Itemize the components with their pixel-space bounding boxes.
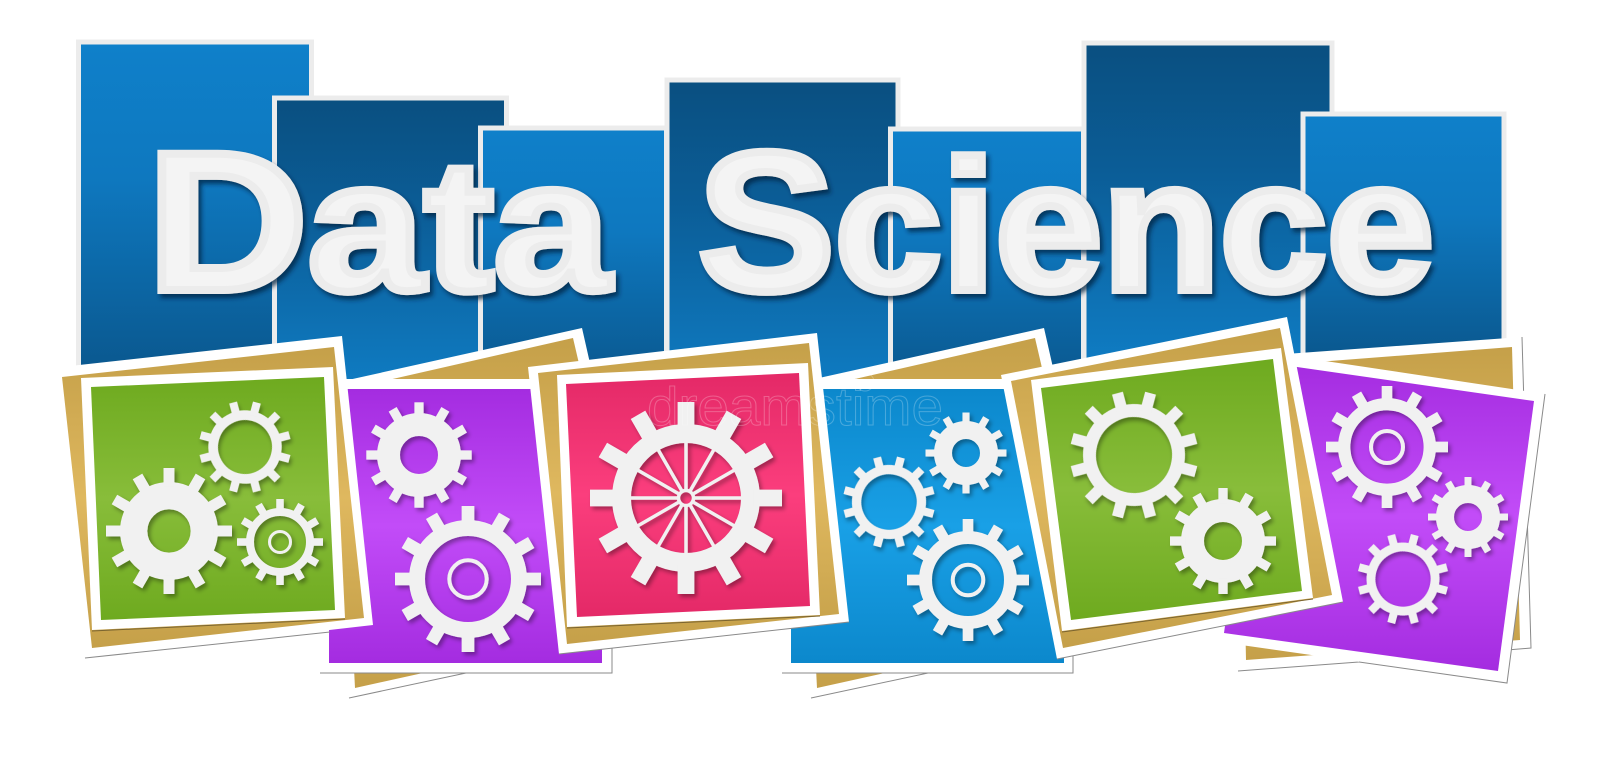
white frame — [81, 367, 345, 630]
frame shadow — [1062, 599, 1313, 632]
card shadow line — [559, 622, 849, 654]
title word: Science: Science — [698, 111, 1434, 332]
white frame — [1031, 348, 1313, 631]
panel: purple square 1 — [319, 328, 650, 698]
gear: open green — [1056, 377, 1212, 533]
tilted backing card — [330, 328, 650, 698]
gear: solid purple — [366, 402, 472, 508]
bar 7 — [1303, 114, 1504, 364]
gear: solid blue — [926, 412, 1006, 494]
pink square — [566, 373, 810, 617]
gear: ringed purple — [1326, 386, 1448, 508]
outer card — [1001, 317, 1343, 659]
gear: ringed blue — [907, 519, 1029, 641]
top blue bars — [78, 42, 1504, 390]
tan card — [62, 347, 364, 648]
card shadow line — [1057, 602, 1343, 659]
panel: green square 1 — [52, 336, 373, 658]
panel: purple square 2 — [1213, 337, 1545, 683]
white frame — [557, 363, 820, 627]
bar 1 — [78, 42, 312, 382]
title word: Data: Data — [147, 111, 612, 332]
bar 2 — [274, 98, 506, 388]
gear: ringed green — [237, 499, 323, 585]
card shadow line — [85, 632, 330, 658]
gear: spoked wheel — [590, 402, 782, 594]
tan card — [1011, 328, 1332, 648]
panel: pink square — [528, 333, 849, 654]
watermark: dreamstime — [647, 377, 943, 437]
bar 3 — [480, 128, 666, 388]
frame shadow — [567, 616, 820, 628]
bar 5 — [890, 129, 1084, 389]
gear: ringed purple — [395, 506, 541, 652]
outer card — [528, 333, 849, 654]
panel: green square 2 — [1001, 317, 1343, 659]
frame shadow — [92, 619, 345, 631]
backing card — [1230, 337, 1531, 671]
outer card — [52, 336, 373, 658]
green square — [1041, 359, 1302, 620]
gear: solid purple — [1428, 477, 1508, 557]
blue square — [781, 379, 1074, 673]
title — [147, 111, 1434, 332]
gear: solid green — [1170, 488, 1276, 594]
gear: solid green — [106, 468, 232, 594]
gear: open purple — [1347, 523, 1459, 635]
purple square — [319, 379, 612, 673]
gear: open green — [189, 391, 301, 503]
green square — [91, 377, 335, 620]
panel: blue square — [781, 328, 1112, 698]
gear: open blue — [833, 446, 945, 558]
tilted purple square — [1213, 350, 1545, 683]
bar 4 — [667, 80, 898, 390]
tan card — [538, 343, 839, 644]
tilted backing card — [792, 328, 1112, 698]
bar 6 — [1084, 43, 1332, 363]
